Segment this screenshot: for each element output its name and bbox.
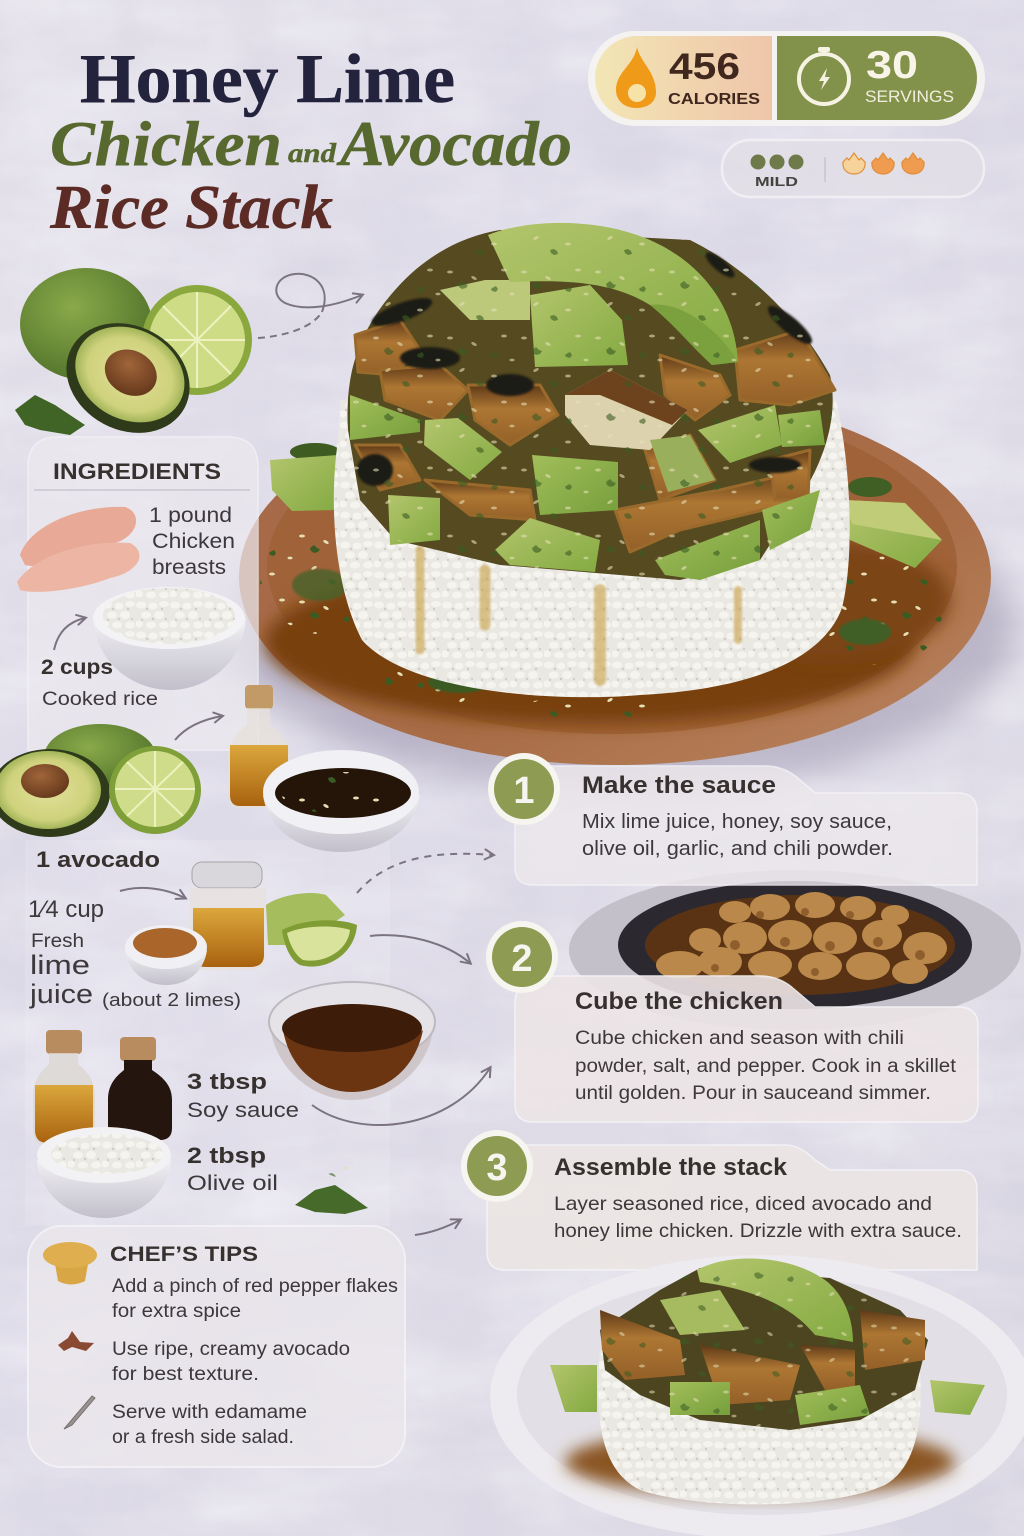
step 2 text: until golden. Pour in sauceand simmer. <box>575 1083 931 1104</box>
step 2 text <box>575 1028 957 1104</box>
step 1 text: olive oil, garlic, and chili powder. <box>582 838 893 860</box>
icon: flame drop <box>616 47 656 108</box>
pan sauce <box>645 895 955 995</box>
servings value: 30 <box>866 44 918 87</box>
tip 2 text: for best texture. <box>112 1364 259 1385</box>
tip 2 text: Use ripe, creamy avocado <box>112 1339 350 1360</box>
spice pill <box>722 140 984 197</box>
title <box>49 41 572 242</box>
sesame and herb garnish <box>348 230 833 580</box>
title line 2: Chicken <box>50 108 282 179</box>
soy sauce bottle <box>108 1037 172 1140</box>
tip 1 text: for extra spice <box>112 1301 241 1322</box>
text: avocado amount: 1 avocado <box>36 847 160 872</box>
whole lime <box>44 724 156 790</box>
lime slice <box>109 746 201 834</box>
badge pill border <box>588 31 985 126</box>
text: lime juice amount: 1⁄4 cup <box>28 896 104 923</box>
avocado slices on top <box>440 223 738 367</box>
text: lime juice amount: (about 2 limes) <box>102 990 241 1010</box>
title line 2: and <box>288 138 337 168</box>
icon: stopwatch <box>799 47 849 104</box>
oil bottle <box>228 685 290 808</box>
charred crust <box>357 249 817 486</box>
dashed arrow to step 1 <box>357 854 493 893</box>
icon: chicken breasts <box>17 507 140 592</box>
step 1 text: Mix lime juice, honey, soy sauce, <box>582 811 892 833</box>
glass bowl of sauce <box>269 982 435 1100</box>
rice <box>598 1350 921 1504</box>
text: chicken amount: breasts <box>152 556 226 579</box>
lime wedges <box>266 893 357 967</box>
avocado and lime group <box>0 724 201 837</box>
white plate <box>490 1255 1024 1536</box>
top-left avocado and lime <box>15 268 252 454</box>
garnish <box>600 1268 928 1430</box>
step 2 text: Cube chicken and season with chili <box>575 1028 904 1049</box>
tip 2 text <box>112 1339 350 1385</box>
avocado half <box>47 302 209 454</box>
chicken pieces <box>355 320 835 552</box>
step 2 number badge: 2 <box>511 938 533 980</box>
calories section <box>595 36 772 120</box>
tip 3 text: Serve with edamame <box>112 1402 307 1423</box>
plate <box>239 389 991 765</box>
step 1 number badge <box>488 753 560 825</box>
step 1 card <box>515 766 977 885</box>
text: chicken amount: Chicken <box>152 530 235 553</box>
panel: ingredients <box>17 437 258 750</box>
text: soy sauce and olive oil amounts: Soy sauce <box>187 1099 299 1122</box>
skillet photo <box>569 870 1021 1030</box>
step 2 card <box>515 976 978 1122</box>
calories value: 456 <box>669 46 740 87</box>
text: lime juice amount: lime <box>30 950 90 980</box>
spice bowl <box>125 925 207 985</box>
icon: chef hat <box>43 1242 97 1284</box>
step 3 number badge <box>461 1130 533 1202</box>
icon: pepper flakes <box>58 1331 94 1351</box>
step 2 text: powder, salt, and pepper. Cook in a skillet <box>575 1056 957 1077</box>
step 1 <box>488 753 977 885</box>
calories label: CALORIES <box>668 91 760 108</box>
title line 1: Honey Lime <box>80 41 455 118</box>
text: soy sauce and olive oil amounts: 3 tbsp <box>187 1069 267 1094</box>
step 2 heading: Cube the chicken <box>575 988 783 1015</box>
plate avocado cubes <box>270 455 942 568</box>
mild dots <box>750 154 804 170</box>
chicken <box>600 1310 925 1405</box>
tip 3 text <box>112 1402 307 1448</box>
avocado cubes in stack <box>350 395 825 580</box>
tip 1 text: Add a pinch of red pepper flakes <box>112 1276 398 1297</box>
text: lime juice amount: Fresh <box>31 931 84 952</box>
topping mound <box>348 230 833 580</box>
bowl of sauce <box>263 750 420 852</box>
step 3 <box>461 1130 977 1270</box>
stats badge: calories and time <box>588 31 985 126</box>
heat flames <box>843 153 924 174</box>
arrow to honey jar <box>120 888 185 898</box>
sauce pool <box>265 540 950 724</box>
icon: bowl of rice <box>93 587 246 690</box>
arrow to step 2 from bowl <box>312 1068 490 1125</box>
faint lower ingredients column <box>25 840 390 1226</box>
title line 3: Rice Stack <box>49 174 333 242</box>
step 1 heading: Make the sauce <box>582 772 776 799</box>
text: soy sauce and olive oil amounts: Olive oil <box>187 1172 278 1195</box>
rice bowl small <box>37 1127 171 1218</box>
plate garnish <box>260 443 945 728</box>
step 2 number badge <box>486 921 558 993</box>
whole lime <box>20 268 152 380</box>
text: soy sauce and olive oil amounts: 2 tbsp <box>187 1143 266 1168</box>
text: chicken amount <box>149 504 235 579</box>
step 1 text <box>582 811 893 860</box>
step 3 number badge: 3 <box>486 1147 508 1189</box>
parsley <box>15 395 85 435</box>
sauce drips <box>420 550 738 680</box>
bottom dish photo <box>490 1255 1024 1536</box>
ingredients card <box>28 437 258 750</box>
side avocado cubes <box>550 1365 985 1415</box>
step 3 text <box>554 1193 962 1242</box>
step 3 text: honey lime chicken. Drizzle with extra sauce. <box>554 1220 962 1242</box>
step 3 heading: Assemble the stack <box>554 1154 788 1181</box>
chicken shading <box>711 908 925 976</box>
main dish: plate with rice stack <box>225 223 1015 790</box>
step 1 number badge: 1 <box>513 770 535 812</box>
servings section <box>777 36 977 120</box>
spice level badge <box>722 140 984 197</box>
olive oil bottle <box>33 1030 95 1145</box>
lime slice <box>142 285 252 395</box>
arrow to rice <box>54 618 85 650</box>
text: rice amount: Cooked rice <box>42 689 158 710</box>
text: lime juice amount: juice <box>29 979 93 1009</box>
step 2 <box>486 921 978 1122</box>
text: lime juice amount <box>28 896 241 1010</box>
heading: ingredients: INGREDIENTS <box>53 459 221 484</box>
title line 2: Avocado <box>336 108 572 179</box>
avocado half <box>0 749 110 837</box>
swirl arrow to dish <box>258 274 362 338</box>
pale chicken slice <box>565 370 688 450</box>
tip 1 text <box>112 1276 398 1322</box>
servings label: SERVINGS <box>865 88 954 106</box>
text: chicken amount: 1 pound <box>149 504 232 527</box>
jar of lime juice <box>190 862 266 970</box>
mild label: MILD <box>755 174 798 189</box>
text: rice amount: 2 cups <box>41 656 113 679</box>
chicken bits <box>656 892 947 984</box>
tips card <box>28 1226 405 1467</box>
rice cake <box>334 400 850 697</box>
arrow to step 2 <box>370 935 470 963</box>
tip 3 text: or a fresh side salad. <box>112 1427 294 1448</box>
icon: knife and herb <box>64 1396 95 1429</box>
arrow to step 3 <box>415 1220 460 1235</box>
topping mass <box>600 1268 928 1430</box>
heading: chef's tips: CHEF’S TIPS <box>110 1243 258 1266</box>
avocado <box>660 1259 870 1425</box>
sauce <box>565 1428 955 1496</box>
arrow to oil <box>175 716 222 740</box>
sesame and parsley <box>295 1151 378 1214</box>
step 3 card <box>487 1145 977 1270</box>
title line 2 <box>50 108 572 179</box>
text: soy sauce and olive oil amounts <box>187 1069 299 1195</box>
oil bottle and soy sauce bottle <box>33 1030 172 1145</box>
step 3 text: Layer seasoned rice, diced avocado and <box>554 1193 932 1215</box>
text: rice amount <box>41 656 158 710</box>
panel: chef's tips <box>28 1226 405 1467</box>
grey plate <box>569 870 1021 1030</box>
dark pan <box>618 881 972 1009</box>
plate shadow <box>225 470 1015 790</box>
